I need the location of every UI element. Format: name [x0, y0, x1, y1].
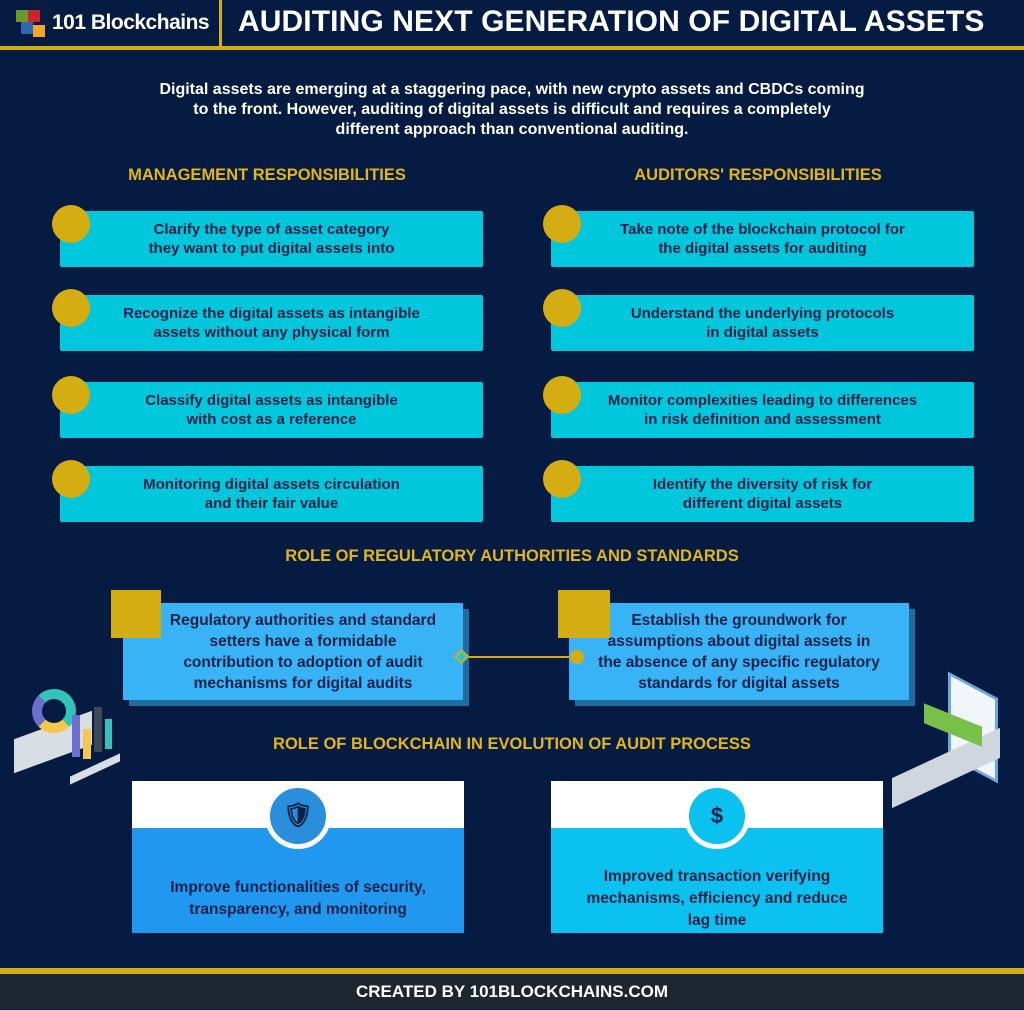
heading: management: MANAGEMENT RESPONSIBILITIES	[128, 166, 406, 184]
card 4: different digital assets	[683, 495, 842, 512]
connector diamond	[454, 649, 469, 664]
heading: regulatory: ROLE OF REGULATORY AUTHORITIES AND STANDARDS	[285, 547, 739, 565]
regulatory box left: Regulatory authorities and standard	[170, 612, 436, 628]
icon: money bag	[558, 590, 610, 638]
blockchain box left: Improve functionalities of security,	[170, 878, 426, 896]
icon 4	[52, 460, 90, 498]
illustration: laptop with money	[892, 672, 1000, 808]
card 4: Monitoring digital assets circulation	[143, 476, 400, 493]
connector dot	[570, 650, 584, 664]
regulatory box right: assumptions about digital assets in	[608, 632, 870, 650]
card 4	[60, 466, 483, 522]
card 3: Classify digital assets as intangible	[145, 392, 398, 409]
regulatory box left	[123, 603, 463, 700]
card 1: they want to put digital assets into	[149, 240, 394, 257]
regulatory box left: mechanisms for digital audits	[194, 674, 412, 692]
title: AUDITING NEXT GENERATION OF DIGITAL ASSETS	[238, 5, 984, 38]
card 2: in digital assets	[706, 324, 819, 341]
icon 1	[52, 205, 90, 243]
blockchain box right: mechanisms, efficiency and reduce	[586, 890, 848, 906]
blockchain box left: transparency, and monitoring	[189, 900, 407, 918]
icon 1	[543, 205, 581, 243]
blockchain box right: Improved transaction verifying	[604, 868, 830, 884]
panel: management cards	[52, 205, 483, 522]
card 3	[551, 382, 974, 438]
illustration: chart	[14, 689, 120, 785]
blockchain box left	[132, 781, 464, 933]
regulatory box right: the absence of any specific regulatory	[598, 654, 880, 670]
regulatory box right: Establish the groundwork for	[631, 612, 847, 628]
blockchain box right	[551, 781, 883, 933]
icon: phone money	[111, 590, 161, 638]
card 1: the digital assets for auditing	[658, 240, 867, 257]
logo	[16, 10, 209, 37]
card 2: assets without any physical form	[154, 324, 389, 341]
footer: CREATED BY 101BLOCKCHAINS.COM	[356, 982, 668, 1001]
connector line	[462, 656, 578, 658]
footer	[0, 968, 1024, 1009]
icon 3	[52, 376, 90, 414]
card 2: Recognize the digital assets as intangible	[123, 305, 420, 322]
card 2	[60, 295, 483, 351]
card 3: Monitor complexities leading to differences	[608, 392, 917, 409]
icon: exchange	[684, 783, 750, 849]
intro text: different approach than conventional auditing.	[336, 121, 688, 138]
card 3: in risk definition and assessment	[644, 411, 881, 428]
icon: shield	[265, 783, 331, 849]
blockchain box right: lag time	[688, 912, 746, 928]
card 1: Take note of the blockchain protocol for	[620, 221, 905, 238]
panel: auditor cards	[543, 205, 974, 522]
card 4: and their fair value	[205, 495, 338, 512]
icon 4	[543, 460, 581, 498]
card 4	[551, 466, 974, 522]
logo: 101 Blockchains	[52, 11, 209, 34]
card 3: with cost as a reference	[186, 411, 357, 428]
intro text: to the front. However, auditing of digital assets is difficult and requires a completely	[193, 101, 831, 118]
heading: blockchain: ROLE OF BLOCKCHAIN IN EVOLUTION OF AUDIT PROCESS	[273, 735, 751, 753]
regulatory box left: setters have a formidable	[210, 632, 396, 650]
regulatory box left: contribution to adoption of audit	[183, 654, 423, 670]
intro text	[159, 81, 865, 138]
card 2: Understand the underlying protocols	[631, 305, 894, 322]
regulatory box right: standards for digital assets	[638, 674, 840, 692]
heading: auditors: AUDITORS' RESPONSIBILITIES	[634, 166, 882, 184]
icon: shield: 🛡	[283, 802, 313, 829]
icon 2	[543, 289, 581, 327]
card 1	[551, 211, 974, 267]
card 1: Clarify the type of asset category	[154, 221, 389, 238]
card 3	[60, 382, 483, 438]
intro text: Digital assets are emerging at a staggering pace, with new crypto assets and CBDCs coming	[159, 81, 865, 98]
regulatory box right	[569, 603, 909, 700]
card 1	[60, 211, 483, 267]
card 2	[551, 295, 974, 351]
icon 2	[52, 289, 90, 327]
card 4: Identify the diversity of risk for	[653, 476, 872, 493]
icon: exchange: $	[711, 803, 723, 828]
header	[0, 0, 1024, 50]
icon 3	[543, 376, 581, 414]
